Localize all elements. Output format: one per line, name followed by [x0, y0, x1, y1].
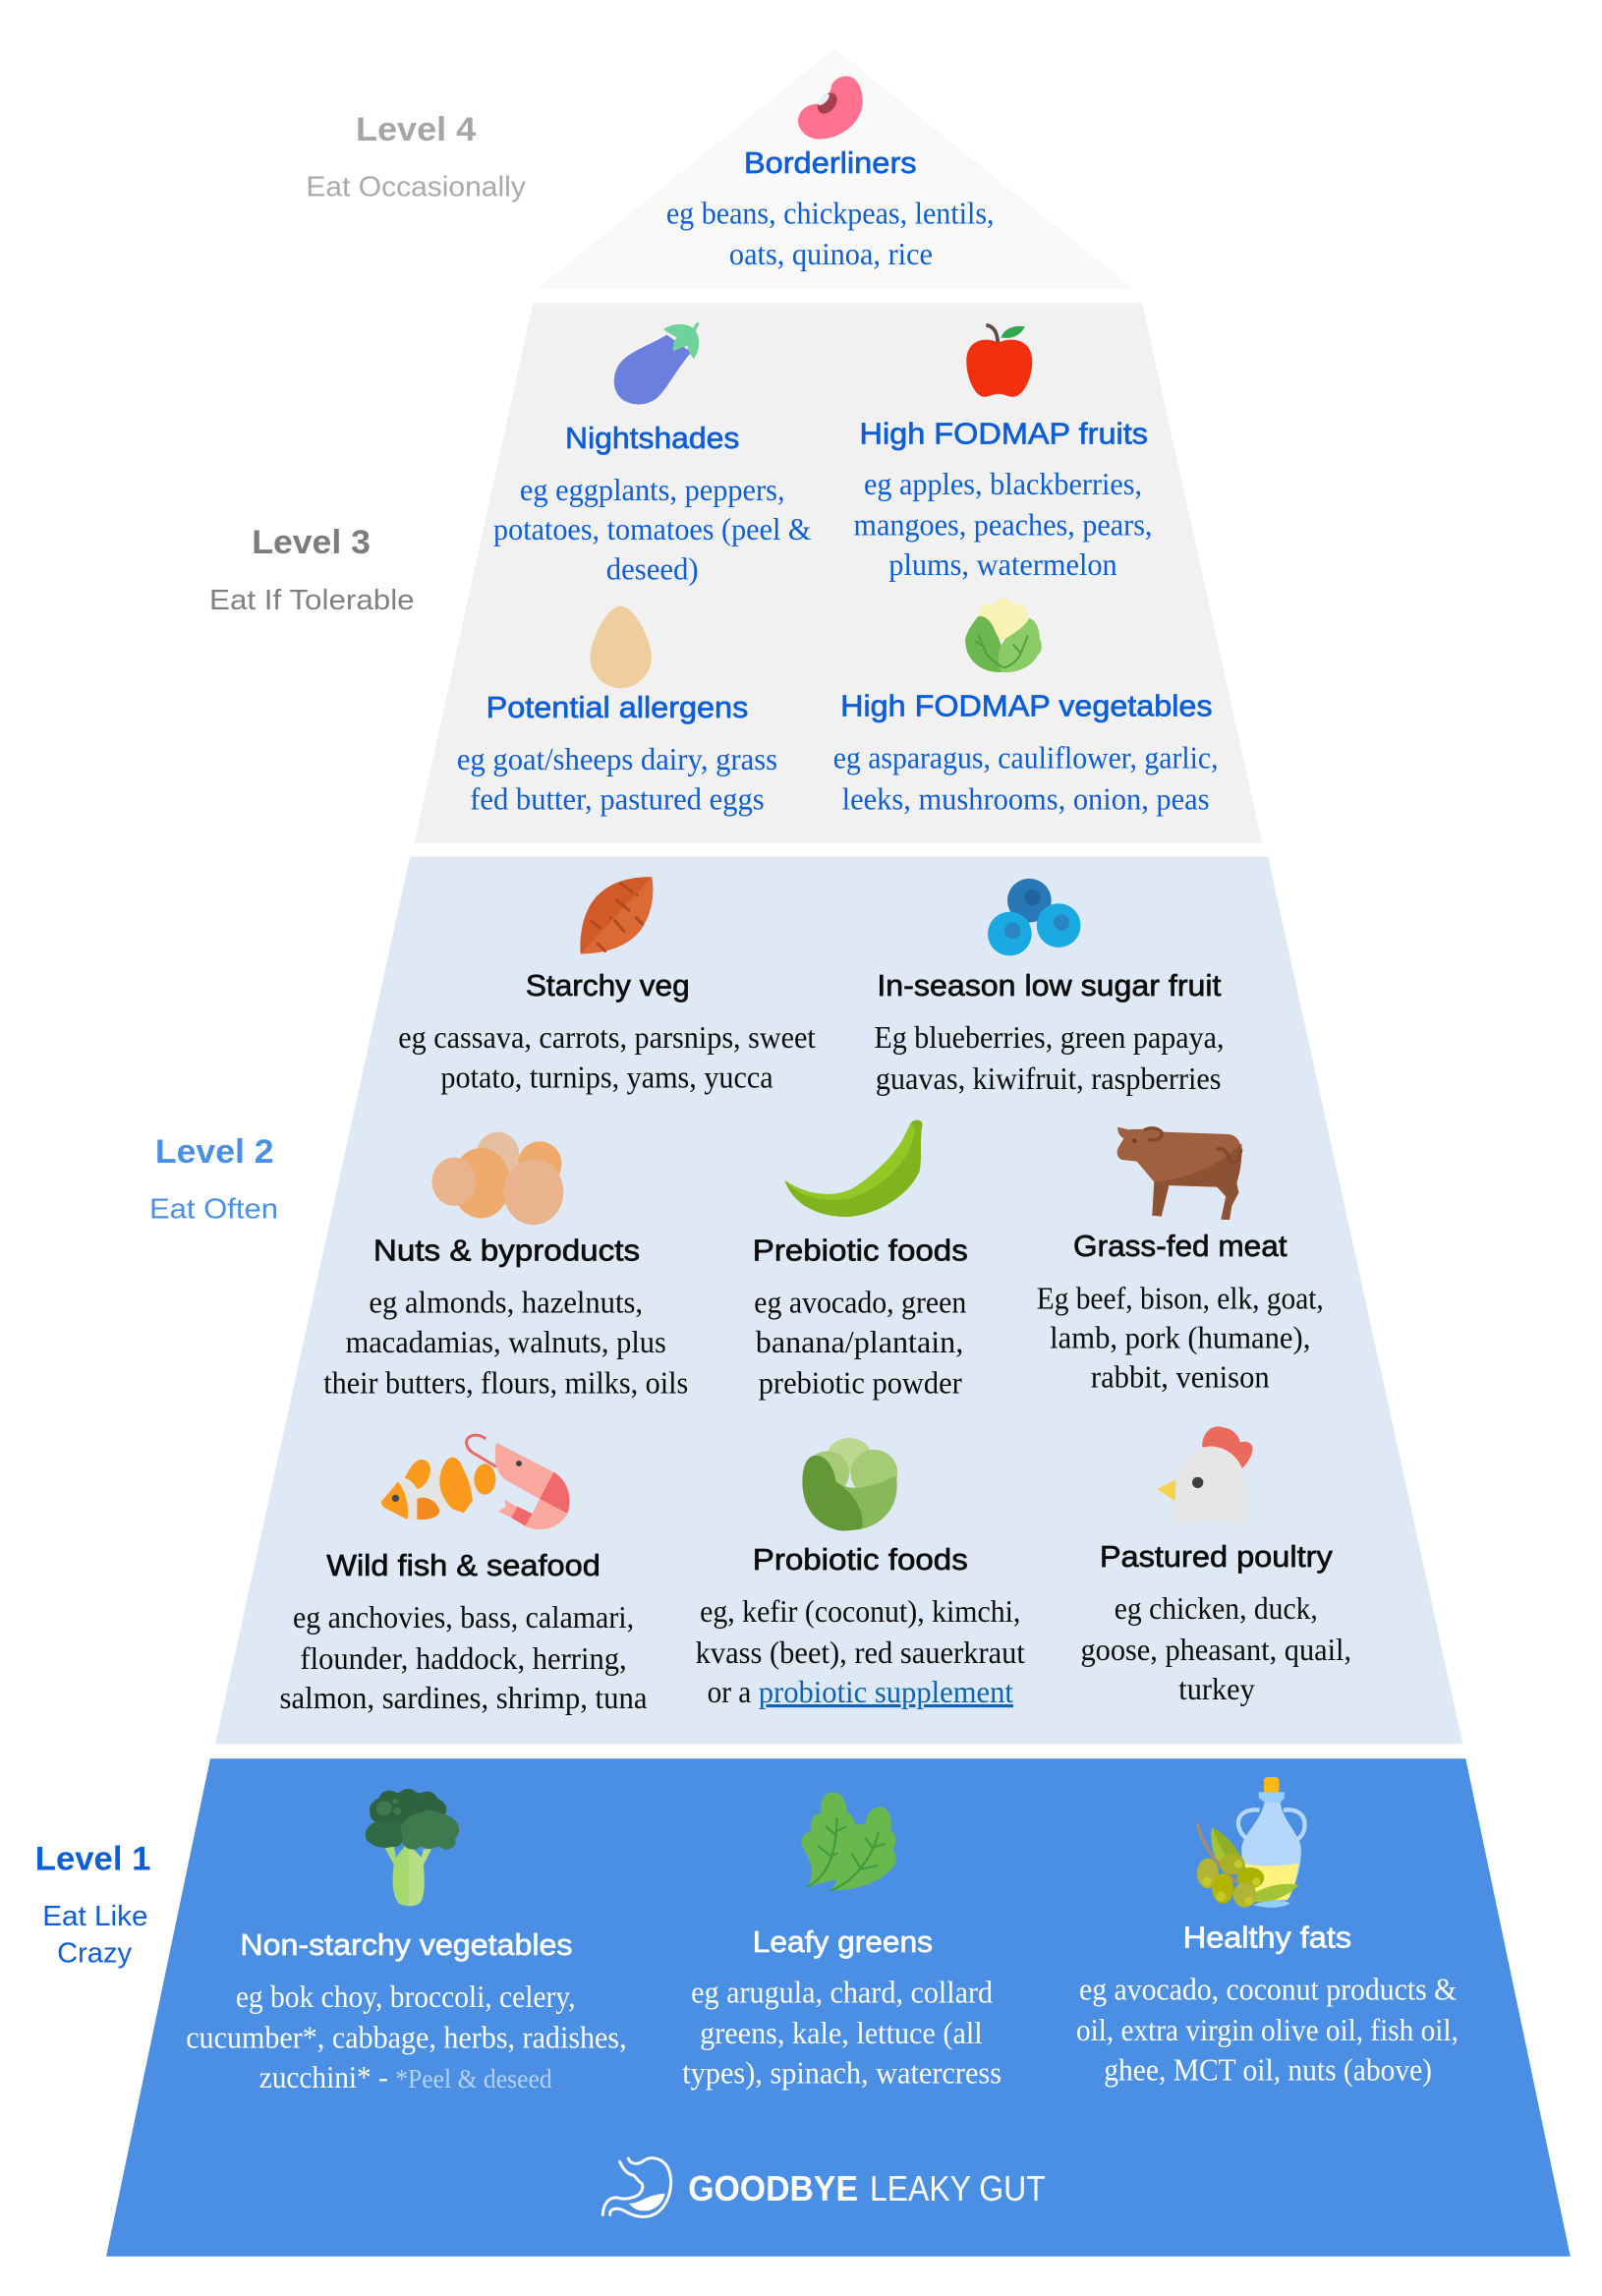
- text: fats examples: [1076, 1972, 1459, 2087]
- heading: wild fish & seafood: Wild fish & seafood: [326, 1549, 601, 1582]
- text: leafy examples: [682, 1975, 1001, 2090]
- text: fats examples: ghee, MCT oil, nuts (above): [1104, 2052, 1432, 2087]
- text: borderliners examples: oats, quinoa, rice: [729, 237, 933, 271]
- heading: starchy veg: Starchy veg: [526, 969, 690, 1003]
- icon: chicken: [1157, 1426, 1252, 1524]
- text: nuts examples: eg almonds, hazelnuts,: [369, 1286, 643, 1320]
- text: meat examples: lamb, pork (humane),: [1050, 1321, 1310, 1355]
- logo: goodbye leaky gut: [602, 2158, 1046, 2216]
- text: prebiotic examples: eg avocado, green: [754, 1286, 967, 1320]
- level 3 label: Level 3: [252, 524, 371, 561]
- text: vegetables examples: [833, 741, 1219, 816]
- heading: high fodmap fruits: High FODMAP fruits: [860, 417, 1148, 450]
- text: borderliners examples: [666, 196, 995, 271]
- text: probiotic examples: [696, 1594, 1025, 1709]
- text: starchy veg examples: potato, turnips, yams, yucca: [440, 1060, 773, 1094]
- text: poultry examples: turkey: [1178, 1672, 1255, 1706]
- text: non-starchy examples: eg bok choy, broccoli, celery,: [236, 1980, 575, 2014]
- heading: pastured poultry: Pastured poultry: [1100, 1540, 1333, 1574]
- icon: sweet potato: [580, 877, 653, 954]
- icon: egg: [590, 606, 652, 688]
- icon: clownfish and shrimp: [380, 1435, 570, 1529]
- level 1 label: [35, 1840, 150, 1969]
- level 3 label: [209, 524, 415, 616]
- text: allergens examples: fed butter, pastured eggs: [470, 781, 765, 816]
- text: vegetables examples: leeks, mushrooms, onion, peas: [842, 781, 1210, 816]
- panel: level 4: [538, 48, 1133, 288]
- text: fats examples: eg avocado, coconut products &: [1079, 1972, 1457, 2006]
- icon: plantain: [785, 1119, 923, 1217]
- text: fruits examples: mangoes, peaches, pears,: [854, 508, 1152, 543]
- level 2 label: Eat Often: [149, 1194, 278, 1226]
- text: seafood examples: flounder, haddock, herring,: [300, 1641, 627, 1676]
- level 1 label: Crazy: [57, 1937, 133, 1969]
- text: nuts examples: their butters, flours, milks, oils: [323, 1366, 688, 1401]
- text: meat examples: Eg beef, bison, elk, goat,: [1037, 1281, 1324, 1315]
- text: probiotic examples: probiotic supplement: [759, 1675, 1013, 1709]
- icon: cow: [1117, 1127, 1241, 1220]
- text: non-starchy examples: [186, 1980, 627, 2095]
- text: nightshades examples: deseed): [606, 551, 699, 586]
- heading: in-season low sugar fruit: In-season low sugar fruit: [877, 969, 1222, 1003]
- text: starchy veg examples: [398, 1020, 816, 1094]
- text: seafood examples: [280, 1600, 648, 1715]
- text: borderliners examples: eg beans, chickpeas, lentils,: [666, 196, 995, 230]
- icon: apple: [966, 325, 1032, 397]
- text: nuts examples: [323, 1286, 688, 1401]
- panel: level 1: [106, 1758, 1571, 2257]
- text: leafy examples: eg arugula, chard, collard: [691, 1975, 993, 2009]
- text: probiotic examples: kvass (beet), red sauerkraut: [696, 1636, 1025, 1670]
- level 1 label: Eat Like: [42, 1901, 147, 1932]
- icon: nuts: [431, 1132, 563, 1225]
- text: nightshades examples: [493, 473, 811, 586]
- text: fruit examples: [874, 1020, 1224, 1096]
- text: non-starchy examples: zucchini* -: [259, 2060, 388, 2095]
- text: nightshades examples: potatoes, tomatoes (peel &: [493, 512, 811, 546]
- text: non-starchy examples: cucumber*, cabbage, herbs, radishes,: [186, 2021, 627, 2055]
- text: prebiotic examples: banana/plantain,: [756, 1325, 963, 1359]
- heading: high fodmap vegetables: High FODMAP vegetables: [840, 690, 1213, 723]
- text: seafood examples: salmon, sardines, shrimp, tuna: [280, 1681, 648, 1715]
- heading: prebiotic foods: Prebiotic foods: [753, 1234, 968, 1268]
- text: nuts examples: macadamias, walnuts, plus: [346, 1325, 666, 1359]
- text: seafood examples: eg anchovies, bass, calamari,: [293, 1600, 634, 1635]
- panel: level 2: [215, 857, 1462, 1744]
- heading: healthy fats: Healthy fats: [1183, 1921, 1351, 1954]
- text: poultry examples: [1080, 1591, 1351, 1706]
- heading: borderliners: Borderliners: [744, 146, 917, 180]
- text: poultry examples: goose, pheasant, quail,: [1080, 1633, 1351, 1667]
- heading: potential allergens: Potential allergens: [486, 691, 748, 724]
- text: probiotic examples: eg, kefir (coconut), kimchi,: [700, 1594, 1020, 1629]
- text: nightshades examples: eg eggplants, peppers,: [520, 473, 785, 507]
- level 2 label: [149, 1133, 278, 1226]
- text: vegetables examples: eg asparagus, cauliflower, garlic,: [833, 741, 1219, 775]
- heading: leafy greens: Leafy greens: [753, 1925, 933, 1959]
- logo: goodbye leaky gut: GOODBYE: [688, 2169, 858, 2209]
- text: non-starchy examples: *Peel & deseed: [395, 2063, 552, 2094]
- level 1 label: Level 1: [35, 1840, 150, 1877]
- text: fruit examples: Eg blueberries, green papaya,: [874, 1020, 1224, 1055]
- text: meat examples: [1037, 1281, 1324, 1395]
- level 4 label: [306, 111, 526, 203]
- level 4 label: Eat Occasionally: [306, 172, 526, 203]
- logo: goodbye leaky gut: LEAKY GUT: [870, 2169, 1046, 2209]
- level 2 label: Level 2: [155, 1133, 274, 1171]
- icon: blueberries: [988, 879, 1080, 955]
- text: poultry examples: eg chicken, duck,: [1115, 1591, 1318, 1626]
- text: prebiotic examples: [754, 1286, 967, 1401]
- heading: nuts & byproducts: Nuts & byproducts: [373, 1234, 640, 1268]
- heading: nightshades: Nightshades: [565, 422, 739, 455]
- panel: level 3: [415, 303, 1262, 843]
- level 4 label: Level 4: [356, 111, 476, 148]
- text: allergens examples: eg goat/sheeps dairy, grass: [457, 742, 777, 776]
- text: fruits examples: [854, 467, 1152, 582]
- heading: non-starchy vegetables: Non-starchy vegetables: [240, 1928, 573, 1962]
- text: fruits examples: plums, watermelon: [888, 547, 1117, 582]
- text: fats examples: oil, extra virgin olive oil, fish oil,: [1076, 2013, 1459, 2047]
- text: leafy examples: types), spinach, watercress: [682, 2055, 1001, 2090]
- text: prebiotic examples: prebiotic powder: [759, 1366, 962, 1401]
- icon: cauliflower: [965, 599, 1042, 672]
- icon: oil bottle and olives: [1197, 1777, 1305, 1908]
- text: allergens examples: [457, 742, 777, 816]
- text: starchy veg examples: eg cassava, carrots, parsnips, sweet: [398, 1020, 816, 1055]
- icon: broccoli: [366, 1789, 459, 1906]
- icon: bean: [798, 76, 863, 140]
- text: fruit examples: guavas, kiwifruit, raspberries: [876, 1062, 1221, 1096]
- icon: leafy greens: [801, 1792, 896, 1890]
- heading: probiotic foods: Probiotic foods: [753, 1543, 968, 1577]
- text: fruits examples: eg apples, blackberries,: [864, 467, 1142, 501]
- icon: eggplant: [614, 321, 700, 404]
- level 3 label: Eat If Tolerable: [209, 585, 415, 616]
- heading: grass-fed meat: Grass-fed meat: [1073, 1230, 1287, 1263]
- text: leafy examples: greens, kale, lettuce (all: [700, 2016, 983, 2050]
- text: meat examples: rabbit, venison: [1091, 1360, 1270, 1395]
- text: probiotic examples: or a: [708, 1675, 751, 1709]
- icon: cabbage: [802, 1438, 897, 1530]
